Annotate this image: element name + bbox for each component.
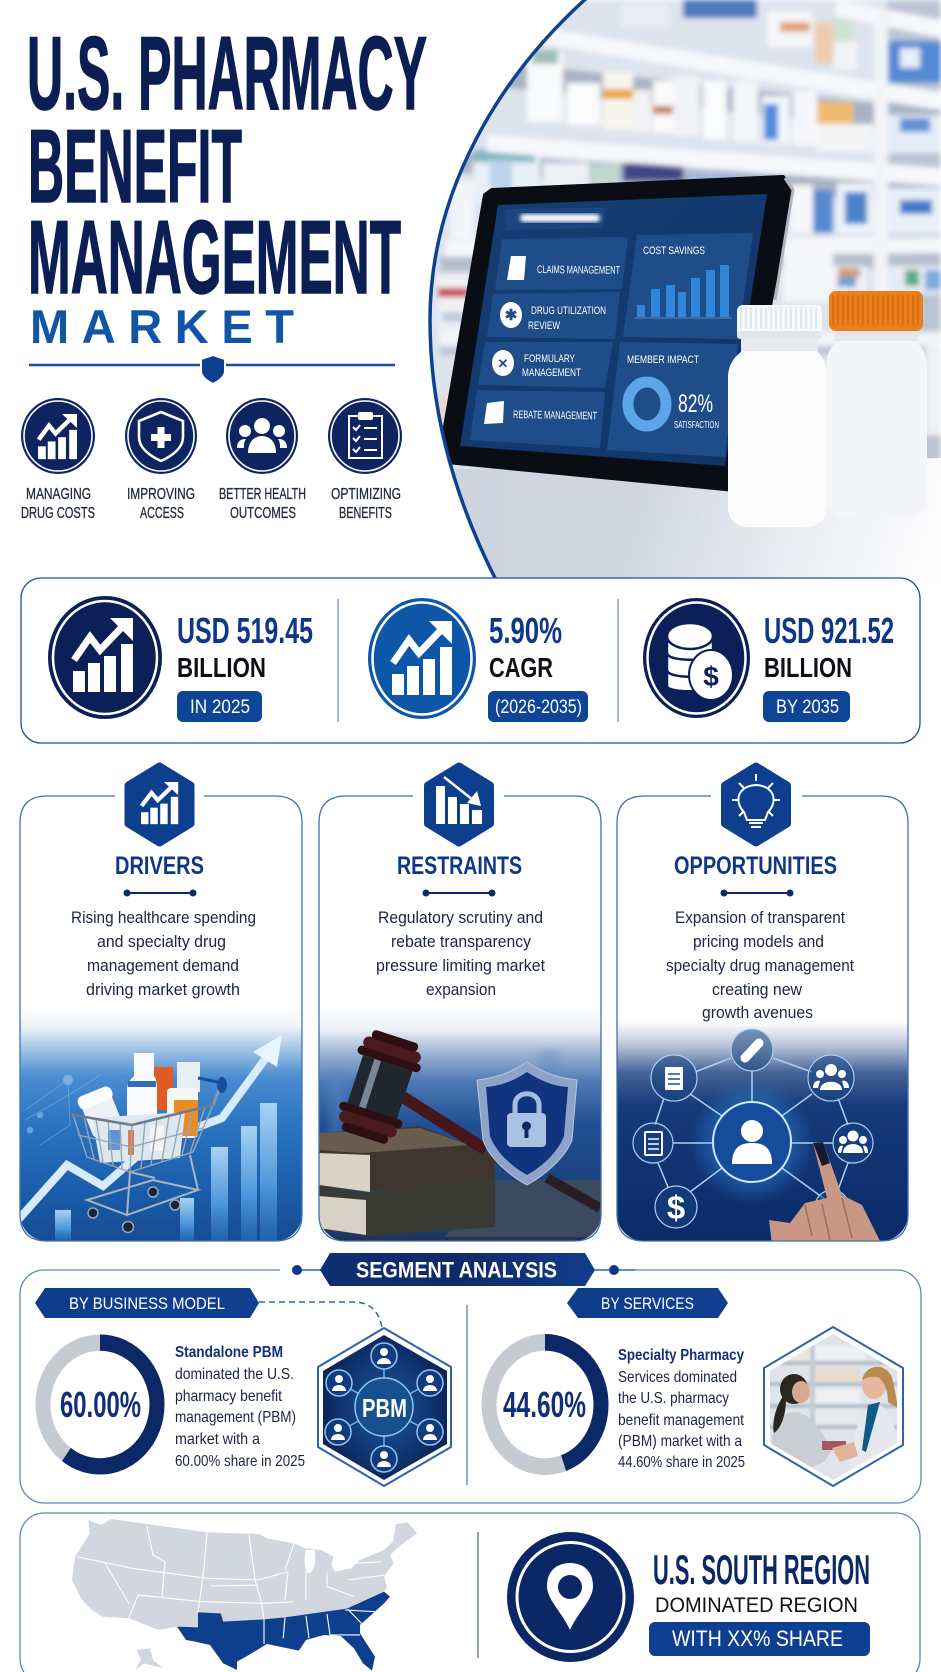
services text: 44.60% share in 2025 [618,1454,745,1471]
orange-cap bottle [826,291,927,474]
opportunities image scene [618,1024,908,1240]
shopping cart with medicines [73,1053,227,1232]
southern states [177,1592,390,1671]
restraints text: rebate transparency [391,932,531,951]
icon labels: IMPROVING [127,486,195,503]
panel: key market stats [21,578,920,743]
heading divider [422,890,496,896]
tag: by services: BY SERVICES [601,1294,694,1313]
icon: light bulb hexagon [725,766,787,842]
opportunities text: specialty drug management [666,956,854,975]
dashboard panel: cost savings bars: COST SAVINGS [643,245,705,257]
stat: market size 2035: BILLION [764,652,852,683]
icon labels: MANAGING [26,486,91,503]
icon labels: BENEFITS [339,505,392,522]
business model text: Standalone PBM [175,1344,283,1361]
stat: cagr: 5.90% [489,610,562,651]
services text: the U.S. pharmacy [618,1390,729,1407]
dashboard panel: drug utilization review: REVIEW [528,320,560,332]
dashboard panel: member impact donut: 82% [678,390,713,418]
section banner: segment analysis [280,1253,635,1286]
services text: Specialty Pharmacy [618,1347,744,1364]
icon: optimizing benefits [328,398,402,474]
donut chart: 60.00%: 60.00% [60,1384,141,1425]
stat: market size 2025: IN 2025 [190,697,250,718]
donut chart: 44.60%: 44.60% [503,1384,586,1425]
dashboard panel: formulary management [478,342,613,388]
second row products [527,52,563,122]
title [27,16,427,316]
dashboard panel: drug utilization review [487,292,620,339]
dashboard panel: member impact donut: MEMBER IMPACT [627,354,699,366]
services text: Services dominated [618,1369,737,1386]
table surface [454,458,936,578]
opportunities text: Expansion of transparent [675,908,845,927]
stat: market size 2035 [643,598,894,722]
heading: drivers: DRIVERS [115,852,204,880]
dashboard panel: formulary management: ✕ [498,356,508,371]
dashboard panel: member impact donut: SATISFACTION [674,420,719,431]
business model text: pharmacy benefit [175,1388,282,1405]
gavel [332,1026,600,1208]
security shield with padlock [477,1062,577,1185]
icon labels: ACCESS [140,505,184,522]
dashboard panel: drug utilization review: DRUG UTILIZATION [531,305,606,317]
hero photo: pharmacy shelves with tablet and bottles [420,0,941,590]
white-cap bottle [728,305,827,527]
map of the United States with South highlighted [72,1519,417,1671]
dashboard panel: rebate management [470,390,605,448]
section banner: segment analysis: SEGMENT ANALYSIS [356,1258,557,1282]
growth bars [55,1103,277,1241]
opportunities text [666,908,854,1022]
top row products [683,0,757,18]
stat: market size 2025 [48,596,313,722]
pointing hand [769,1142,882,1245]
stat: market size 2025: USD 519.45 [177,610,313,651]
cart lower frame [87,1155,198,1215]
basket wires [73,1105,213,1172]
drivers text [71,908,256,999]
icon labels [21,486,401,522]
opportunities card outline [617,796,908,1241]
services text: benefit management [618,1412,744,1429]
stat: market size 2035: BY 2035 [776,697,839,718]
services text [618,1347,745,1471]
tag: by services [567,1288,728,1318]
icon row: focus areas [21,398,402,522]
drivers text: driving market growth [86,980,240,999]
subtitle: market: MARKET [30,300,294,353]
restraints text: Regulatory scrutiny and [378,908,543,927]
share pill: WITH XX% SHARE [672,1626,843,1651]
icon: improving access [125,398,197,474]
panel: drivers [18,766,302,1245]
title: MANAGEMENT [28,200,401,316]
dashboard panel: claims management [495,237,628,290]
restraints card outline [319,796,601,1241]
business model text: dominated the U.S. [175,1366,294,1383]
panel: segment analysis [20,1253,921,1503]
dashboard panel: drug utilization review: ✱ [505,307,518,324]
connector: dashed line to PBM hexagon [259,1302,382,1328]
pharmacist [850,1367,900,1490]
business model text [175,1344,305,1470]
stat: cagr: (2026-2035) [495,697,582,718]
business model text: 60.00% share in 2025 [175,1453,305,1470]
icon labels: BETTER HEALTH [219,486,306,503]
icon: growth hexagon [128,766,190,842]
icon labels: OPTIMIZING [331,486,401,503]
patient [772,1374,832,1490]
opportunities text: pricing models and [693,932,824,951]
network nodes [633,1029,873,1228]
photo hexagon: pharmacist and patient [764,1327,904,1490]
drivers text: management demand [87,956,239,975]
icon: PBM network hexagon [315,1325,455,1490]
desk surface [445,1180,600,1240]
shelf boards [530,26,941,110]
heading divider [720,890,794,896]
drivers text: and specialty drug [97,932,226,951]
business model text: management (PBM) [175,1409,296,1426]
digital network: $ [667,1189,685,1226]
dashboard panel: member impact donut [607,342,738,457]
restraints text [376,908,545,999]
blurred pharmacy shelves [432,0,941,470]
stat: market size 2035: $ [703,661,719,692]
fourth row products [783,252,833,302]
services text: (PBM) market with a [618,1433,742,1450]
title: BENEFIT [28,109,242,225]
tablet with dashboard [441,177,793,490]
drivers text: Rising healthcare spending [71,908,256,927]
heading divider [124,890,196,896]
tag: by business model [35,1288,259,1318]
dashboard panel: formulary management: MANAGEMENT [522,367,581,379]
panel: opportunities [617,766,908,1245]
dashboard panel: cost savings bars [623,233,753,339]
icon labels: DRUG COSTS [21,505,95,522]
donut chart: 60.00% [43,1343,157,1466]
stat: cagr [368,598,588,722]
heading: restraints: RESTRAINTS [397,852,522,880]
stat: cagr: CAGR [489,652,553,683]
restraints text: pressure limiting market [376,956,545,975]
icon: location pin [507,1532,634,1662]
heading: U.S. South region: DOMINATED REGION [655,1594,858,1617]
heading: opportunities: OPPORTUNITIES [674,852,837,880]
dashboard panel: claims management: CLAIMS MANAGEMENT [537,264,620,277]
hero arc border [430,0,590,584]
opportunities text: creating new [712,980,803,999]
icon: better health outcomes [226,398,298,474]
business model text: market with a [175,1431,260,1448]
stat: market size 2025: BILLION [177,652,266,683]
growth arrow [18,1035,282,1220]
heading: U.S. South region [649,1546,870,1656]
text: U.S. PHARMACY [27,16,427,132]
restraints text: expansion [426,980,496,999]
drivers card outline [20,796,302,1241]
drivers image scene [18,1005,302,1245]
icon labels: OUTCOMES [230,505,296,522]
law books [319,1126,601,1242]
dashboard panel: formulary management: FORMULARY [524,353,575,365]
title divider with shield [29,355,395,384]
opportunities text: growth avenues [702,1003,813,1022]
dashboard panel: rebate management: REBATE MANAGEMENT [513,409,597,422]
panel: regional analysis [20,1513,920,1672]
share pill [649,1622,870,1656]
third row products [473,152,540,202]
icon: PBM network hexagon: PBM [362,1393,407,1423]
icon: managing drug costs [21,398,95,474]
digital network [633,1029,873,1228]
tag: by business model: BY BUSINESS MODEL [69,1294,225,1313]
network centre: member [713,1102,791,1182]
panel: restraints [319,766,601,1245]
restraints image scene [319,1005,601,1245]
donut chart: 44.60% [489,1342,601,1467]
medicines [76,1053,200,1163]
icon: declining bars hexagon [428,766,490,842]
